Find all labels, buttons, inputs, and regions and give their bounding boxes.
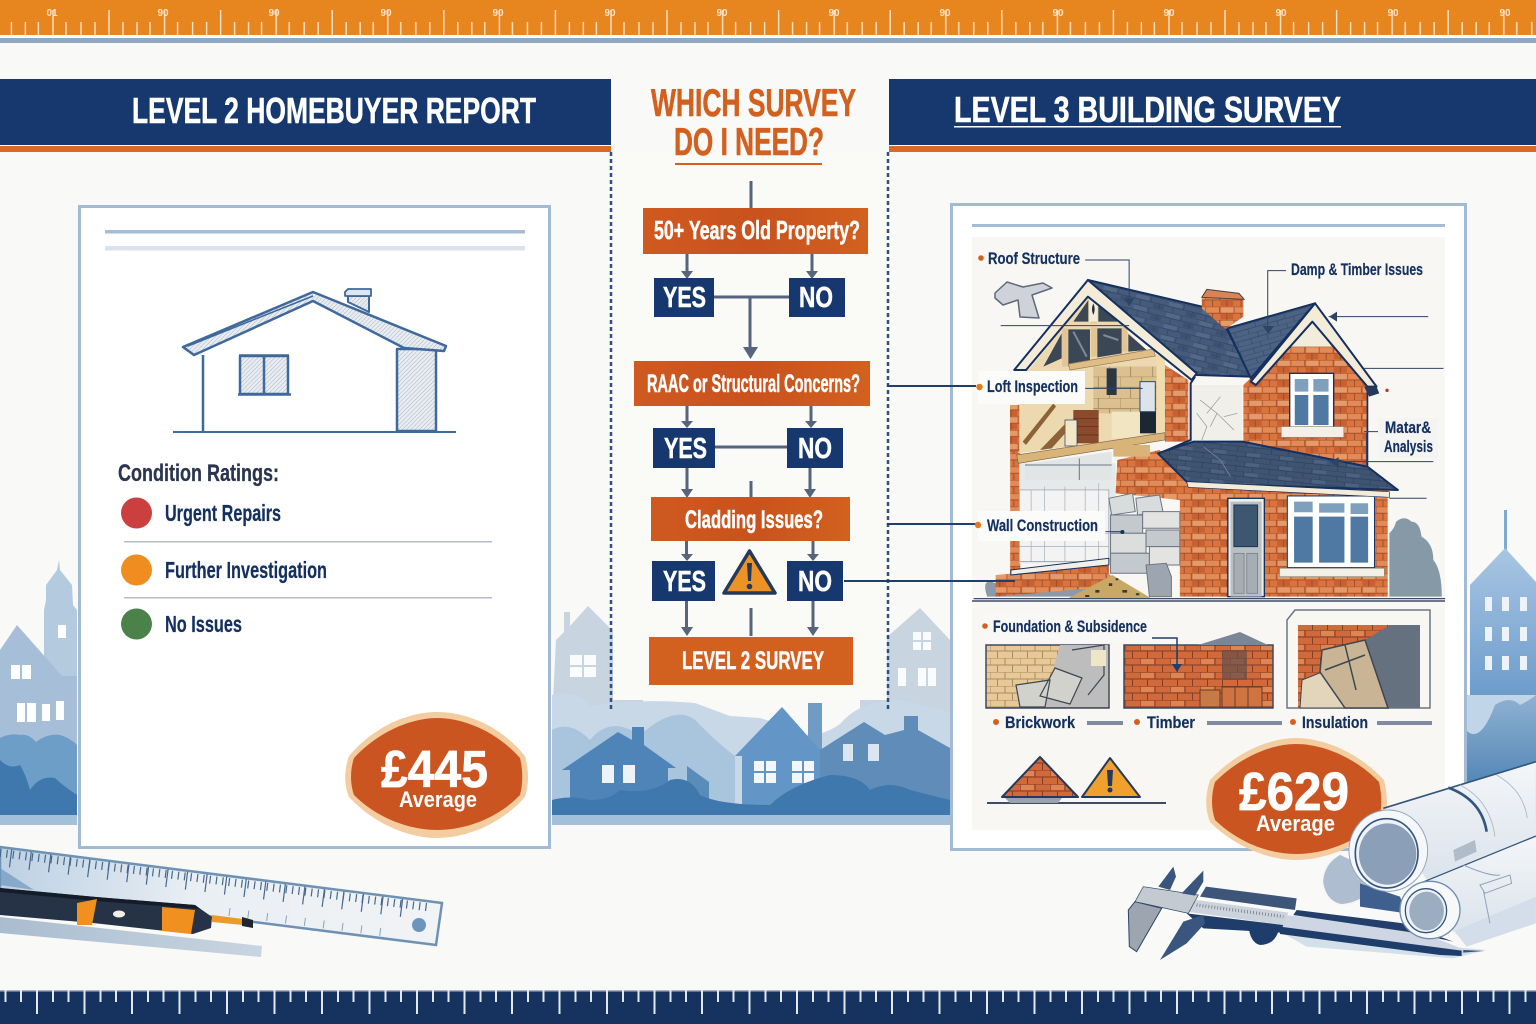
no box 1: NO bbox=[799, 282, 833, 314]
dotted dividers bbox=[611, 152, 888, 712]
title: which survey do I need: DO I NEED? bbox=[674, 121, 824, 164]
rating: no issues bbox=[121, 608, 242, 640]
top ruler band: 90 bbox=[716, 8, 728, 19]
top ruler band: 90 bbox=[157, 8, 169, 19]
top ruler band: 90 bbox=[1387, 8, 1399, 19]
bottom ruler band bbox=[0, 990, 1536, 1024]
label: insulation: Insulation bbox=[1302, 713, 1368, 732]
no box 1 bbox=[789, 278, 845, 317]
no box 2: NO bbox=[798, 433, 832, 465]
yes box 2: YES bbox=[664, 433, 707, 465]
no box 3: NO bbox=[798, 566, 832, 598]
icon: blueprint rolls bbox=[1322, 762, 1536, 947]
question: 50+ years old bbox=[643, 208, 868, 254]
header: Level 3 Building Survey: LEVEL 3 BUILDING SURVEY bbox=[954, 89, 1341, 130]
left skyline bbox=[0, 560, 77, 825]
top ruler band: 01 bbox=[46, 8, 58, 19]
yes box 2 bbox=[653, 428, 715, 468]
icon: house line drawing bbox=[173, 289, 456, 432]
top ruler band: 90 bbox=[1163, 8, 1175, 19]
annotation lines bbox=[1001, 260, 1443, 532]
top ruler band: 90 bbox=[268, 8, 280, 19]
section: foundation and materials bbox=[972, 600, 1445, 803]
label: wall construction: Wall Construction bbox=[987, 516, 1098, 535]
right skyline bbox=[1466, 510, 1536, 825]
header: Level 3 Building Survey bbox=[889, 79, 1536, 152]
label: damp and timber: Damp & Timber Issues bbox=[1291, 260, 1423, 279]
label: loft inspection bbox=[976, 371, 1085, 404]
price badge: 629: Average bbox=[1256, 811, 1335, 836]
question: RAAC bbox=[634, 361, 870, 406]
rating: further investigation bbox=[121, 554, 327, 586]
top ruler band: 90 bbox=[492, 8, 504, 19]
no box 2 bbox=[787, 428, 843, 468]
panel: brickwork sample bbox=[986, 645, 1109, 708]
rating: urgent repairs: Urgent Repairs bbox=[165, 500, 281, 526]
panel: insulation sample bbox=[1287, 610, 1430, 708]
no box 3 bbox=[787, 561, 843, 601]
roofs and gables bbox=[974, 260, 1445, 599]
label: mortar analysis: Analysis bbox=[1384, 437, 1433, 456]
icon: trowel bbox=[995, 282, 1052, 318]
bargeboards bbox=[1014, 280, 1197, 380]
top ruler band: 90 bbox=[1275, 8, 1287, 19]
label: timber bbox=[1134, 713, 1282, 732]
rating: urgent repairs bbox=[121, 498, 281, 528]
yes box 3 bbox=[652, 561, 715, 601]
icon: pencil with shadow bbox=[0, 888, 262, 957]
ground floor window bbox=[1280, 496, 1384, 577]
label: roof structure bbox=[975, 247, 1085, 269]
upper centre cracked wall bbox=[1191, 385, 1242, 444]
centre flowchart background bbox=[613, 152, 887, 700]
label: foundation and subsidence: Foundation & Subsidence bbox=[993, 617, 1147, 636]
label: mortar analysis bbox=[1378, 418, 1438, 458]
flowchart bbox=[634, 181, 870, 685]
top ruler band bbox=[0, 0, 1536, 43]
label: brickwork bbox=[993, 713, 1123, 732]
header: Level 2 Homebuyer Report bbox=[0, 79, 611, 152]
door bbox=[1228, 498, 1264, 597]
label: insulation bbox=[1290, 713, 1432, 732]
label: brickwork: Brickwork bbox=[1005, 713, 1075, 732]
lower roof bbox=[1158, 442, 1398, 490]
title: which survey do I need: WHICH SURVEY bbox=[651, 82, 856, 125]
header: Level 2 Homebuyer Report: LEVEL 2 HOMEBUYER REPORT bbox=[132, 90, 536, 131]
centre skyline bbox=[552, 606, 950, 825]
result: level 2 survey: LEVEL 2 SURVEY bbox=[682, 647, 824, 675]
loft interior bbox=[1010, 295, 1188, 480]
annotation lines: link from flowchart bbox=[844, 386, 1015, 581]
yes box 3: YES bbox=[663, 566, 706, 598]
label: wall construction bbox=[975, 511, 1105, 541]
label: timber: Timber bbox=[1147, 713, 1195, 732]
result: level 2 survey bbox=[649, 637, 853, 685]
icon: warning triangle bbox=[724, 551, 775, 593]
price badge: 629 bbox=[1206, 738, 1387, 860]
top ruler band: 90 bbox=[939, 8, 951, 19]
label: mortar analysis: Matar& bbox=[1385, 418, 1431, 437]
title: which survey do I need bbox=[651, 82, 856, 165]
top ruler band: 90 bbox=[828, 8, 840, 19]
price badge: 445: Average bbox=[399, 787, 477, 812]
illustration: house cutaway bbox=[974, 260, 1445, 599]
yes box 1 bbox=[654, 278, 714, 317]
top ruler band: 90 bbox=[1052, 8, 1064, 19]
panel: timber sample bbox=[1124, 632, 1273, 708]
panel: level 2 report document bbox=[80, 206, 550, 848]
label: foundation and subsidence bbox=[982, 612, 1152, 642]
question: 50+ years old: 50+ Years Old Property? bbox=[654, 215, 860, 245]
question: cladding: Cladding Issues? bbox=[685, 506, 823, 534]
ground line bbox=[974, 597, 1445, 601]
heading: condition ratings: Condition Ratings: bbox=[118, 460, 279, 487]
gutter bbox=[1160, 377, 1195, 453]
icon: calipers bbox=[1128, 867, 1487, 960]
house walls and openings bbox=[985, 322, 1442, 598]
price badge: 445 bbox=[345, 712, 528, 838]
icon: brick pile with warning bbox=[987, 757, 1166, 803]
price badge: 629: £629 bbox=[1239, 762, 1349, 822]
rating: no issues: No Issues bbox=[165, 611, 242, 637]
upper window bbox=[1281, 373, 1344, 437]
question: cladding bbox=[651, 497, 850, 541]
panel: level 3 survey document bbox=[844, 204, 1466, 860]
question: RAAC: RAAC or Structural Concerns? bbox=[647, 370, 860, 398]
label: loft inspection: Loft Inspection bbox=[987, 377, 1078, 396]
top ruler band: 90 bbox=[604, 8, 616, 19]
price badge: 445: £445 bbox=[381, 741, 488, 799]
yes box 1: YES bbox=[663, 282, 706, 314]
icon: ruler bbox=[0, 847, 442, 945]
label: roof structure: Roof Structure bbox=[988, 249, 1080, 268]
label: damp and timber bbox=[1286, 258, 1427, 280]
chimney bbox=[1202, 289, 1244, 329]
right gable brick wall bbox=[1243, 322, 1367, 467]
rating: further investigation: Further Investigation bbox=[165, 557, 327, 583]
top ruler band: 90 bbox=[380, 8, 392, 19]
top ruler band: 90 bbox=[1499, 8, 1511, 19]
